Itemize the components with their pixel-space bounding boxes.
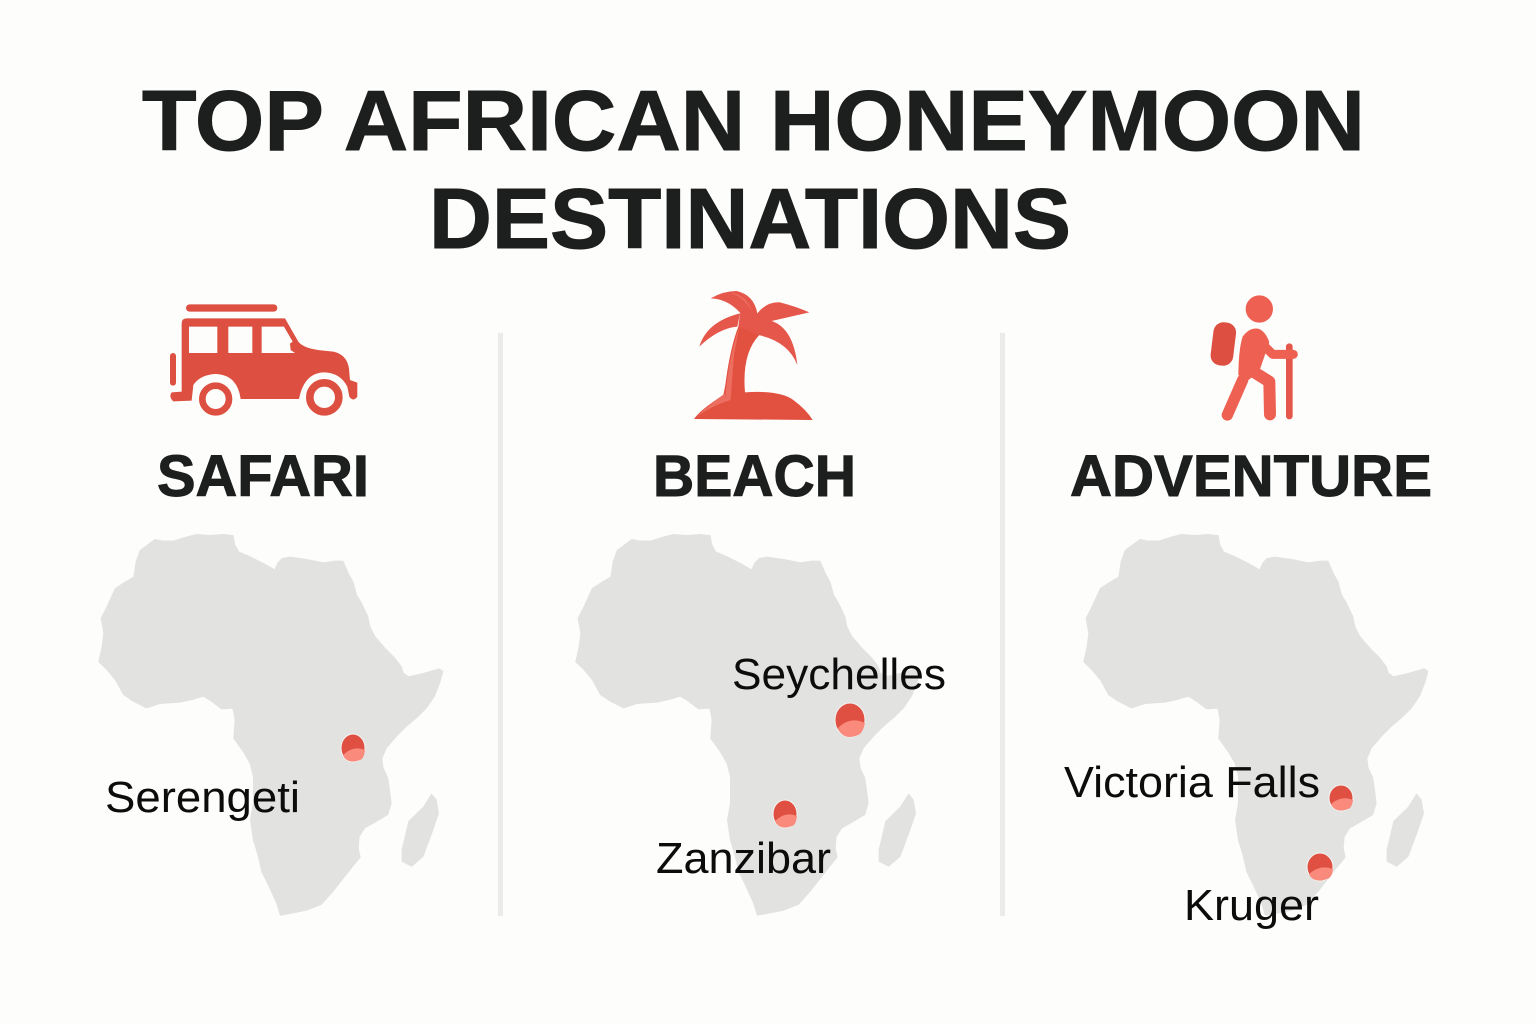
label: Kruger: Kruger [1184,881,1319,930]
title: DESTINATIONS [429,172,1071,267]
icon: safari jeep [170,304,357,412]
panel: beach [576,291,946,915]
map: Africa safari [99,535,442,915]
pin: Seychelles [835,703,865,737]
heading: adventure: ADVENTURE [1070,444,1432,509]
icon: palm tree on island [694,291,813,420]
pin: Serengeti [341,734,365,762]
label: Zanzibar: Zanzibar [656,834,831,883]
label: Seychelles: Seychelles [732,650,946,699]
icon: hiker [1209,295,1293,419]
map: Africa adventure [1084,535,1427,915]
heading: safari: SAFARI [157,444,369,509]
panel: adventure [1064,295,1432,930]
heading: beach: BEACH [653,444,856,509]
title [142,74,1365,267]
pin: Zanzibar [773,800,797,828]
pin: Victoria Falls [1329,785,1353,811]
title: TOP AFRICAN HONEYMOON [142,74,1365,169]
pin: Kruger [1307,853,1333,881]
label: Victoria Falls: Victoria Falls [1064,758,1320,807]
label: Serengeti: Serengeti [105,773,300,822]
map: Africa beach [576,535,919,915]
panel: safari [99,304,442,915]
